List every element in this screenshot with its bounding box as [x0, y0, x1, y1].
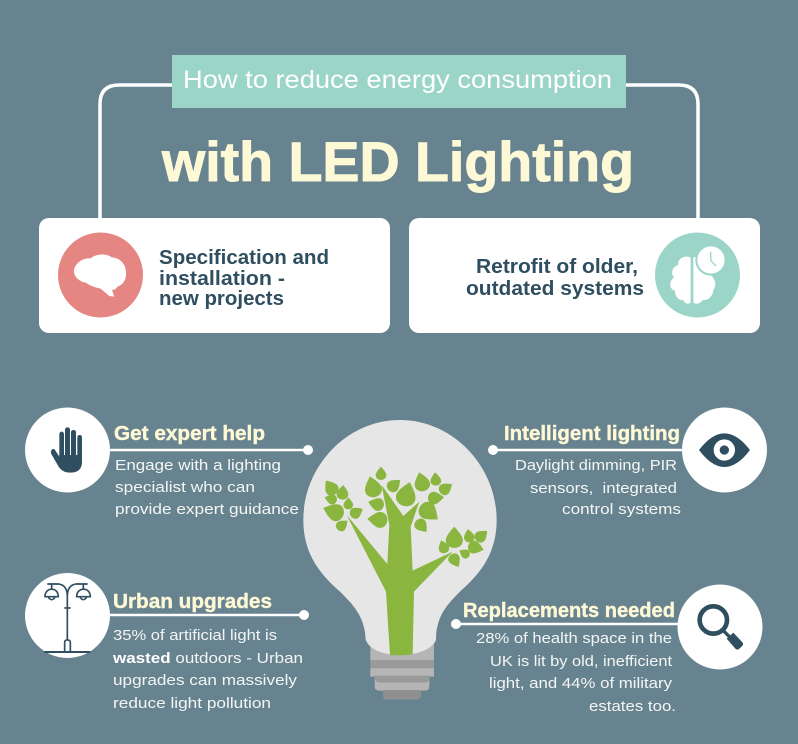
subtitle tab: How to reduce energy consumption: [183, 66, 612, 94]
text block: replacements needed: estates too.: [589, 698, 676, 715]
text block: get expert help: Engage with a lighting: [115, 457, 281, 474]
text block: intelligent lighting: Daylight dimming, PIR: [515, 457, 677, 474]
panel text: retrofit: outdated systems: [466, 278, 644, 300]
bulb screw base: [370, 643, 434, 699]
panel text: retrofit: Retrofit of older,: [476, 256, 638, 278]
text block: urban upgrades: wasted outdoors - Urban: [112, 650, 303, 667]
illustration: light bulb with tree: [303, 420, 497, 699]
connector: get expert help: [105, 445, 313, 455]
connector: replacements needed: [451, 619, 685, 629]
panel text: retrofit: [466, 256, 644, 300]
text block: replacements needed: UK is lit by old, inefficient: [490, 653, 673, 670]
panel: specification and installation: [39, 218, 390, 333]
icon: street lamp: [25, 573, 110, 658]
text block: replacements needed: Replacements needed: [463, 600, 675, 622]
connector: intelligent lighting: [488, 445, 690, 455]
panel text: specification: Specification and: [159, 247, 329, 269]
title: with LED Lighting: [161, 130, 634, 193]
text block: get expert help: [114, 423, 299, 518]
panel: retrofit of older systems: [409, 218, 760, 333]
text block: replacements needed: light, and 44% of military: [489, 675, 673, 692]
icon: hand: [25, 408, 110, 492]
text block: intelligent lighting: [504, 423, 681, 518]
bulb glass: [303, 420, 497, 655]
header frame: [100, 85, 698, 220]
panel text: specification: installation -: [159, 268, 285, 290]
text block: get expert help: provide expert guidance: [115, 501, 299, 518]
icon: brain with clock on teal circle: [655, 232, 740, 318]
panel text: specification: new projects: [159, 288, 284, 310]
text block: intelligent lighting: control systems: [562, 501, 681, 518]
text block: urban upgrades: reduce light pollution: [113, 695, 271, 712]
panel text: specification: [159, 247, 329, 310]
text block: intelligent lighting: sensors, integrated: [530, 480, 677, 497]
subtitle tab: [172, 55, 626, 108]
icon: eye: [682, 408, 767, 492]
text block: get expert help: specialist who can: [115, 479, 255, 496]
icon: magnifier: [678, 584, 762, 670]
text block: urban upgrades: upgrades can massively: [113, 672, 298, 689]
text block: urban upgrades: [112, 591, 303, 712]
text block: intelligent lighting: Intelligent lighting: [504, 423, 680, 445]
text block: replacements needed: [463, 600, 676, 715]
text block: replacements needed: 28% of health space in the: [476, 630, 672, 647]
text block: get expert help: Get expert help: [114, 423, 265, 445]
tree: [320, 467, 491, 655]
connector: urban upgrades: [105, 610, 309, 620]
text block: urban upgrades: Urban upgrades: [113, 591, 272, 613]
text block: urban upgrades: 35% of artificial light is: [113, 627, 277, 644]
icon: brain on pink circle: [58, 232, 143, 318]
